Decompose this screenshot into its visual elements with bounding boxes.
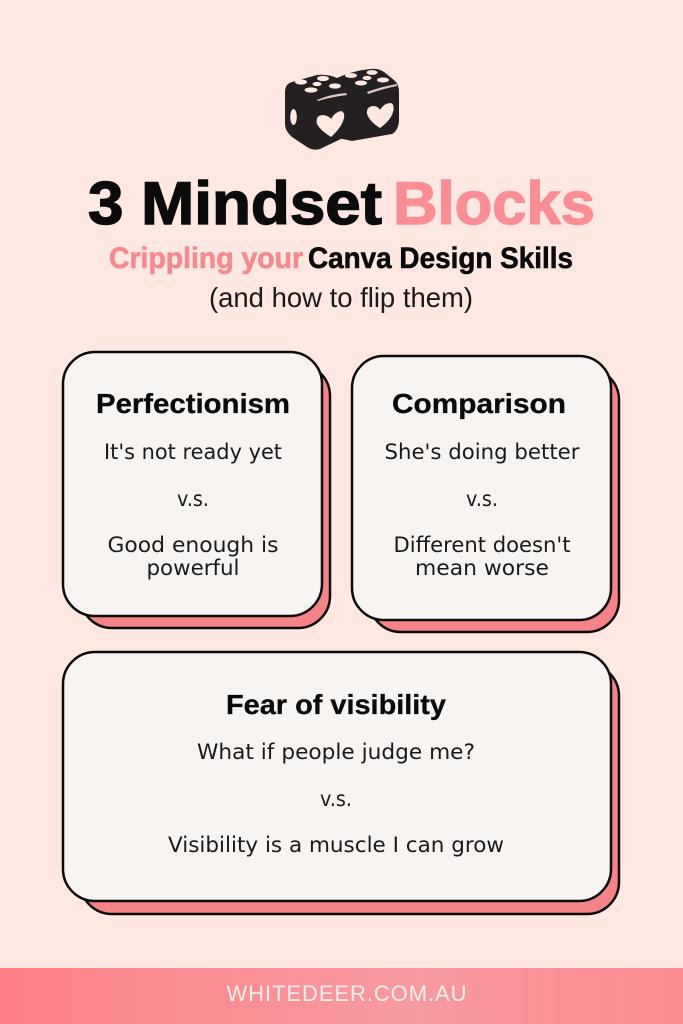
card shadow [80,364,330,628]
tagline: (and how to flip them) [209,282,473,313]
card face [63,652,611,901]
footer website: WHITEDEER.COM.AU [226,981,466,1006]
subtitle [109,242,573,275]
text: limiting thought: It's not ready yet [104,440,282,464]
text: flipped thought [394,533,570,580]
text: flipped thought: Good enough is [108,533,278,557]
title: Blocks [393,170,595,237]
text: versus: v.s. [466,487,498,511]
panel: fear of visibility [63,652,619,914]
footer bar [0,968,683,1024]
title [88,170,595,237]
card face [352,356,611,620]
text: limiting thought: What if people judge me? [197,740,475,764]
text: flipped thought: Different doesn't [394,533,570,557]
panel: perfectionism [63,352,330,628]
text: versus: v.s. [177,487,209,511]
heading: perfectionism: Perfectionism [96,388,290,419]
card shadow [369,368,619,632]
title: 3 Mindset [88,170,382,237]
subtitle: Canva Design Skills [308,242,573,275]
heading: fear of visibility: Fear of visibility [226,689,446,720]
heading: comparison: Comparison [392,388,566,419]
text: versus: v.s. [320,787,352,811]
text: flipped thought: Visibility is a muscle I can grow [168,833,504,857]
card face [63,352,322,616]
panel: comparison [352,356,619,632]
text: flipped thought: powerful [146,556,240,580]
text: flipped thought [108,533,278,580]
icon: two dice with hearts [285,69,399,150]
text: flipped thought: mean worse [415,556,549,580]
subtitle: Crippling your [109,242,303,275]
text: limiting thought: She's doing better [384,440,580,464]
card shadow [80,664,619,914]
